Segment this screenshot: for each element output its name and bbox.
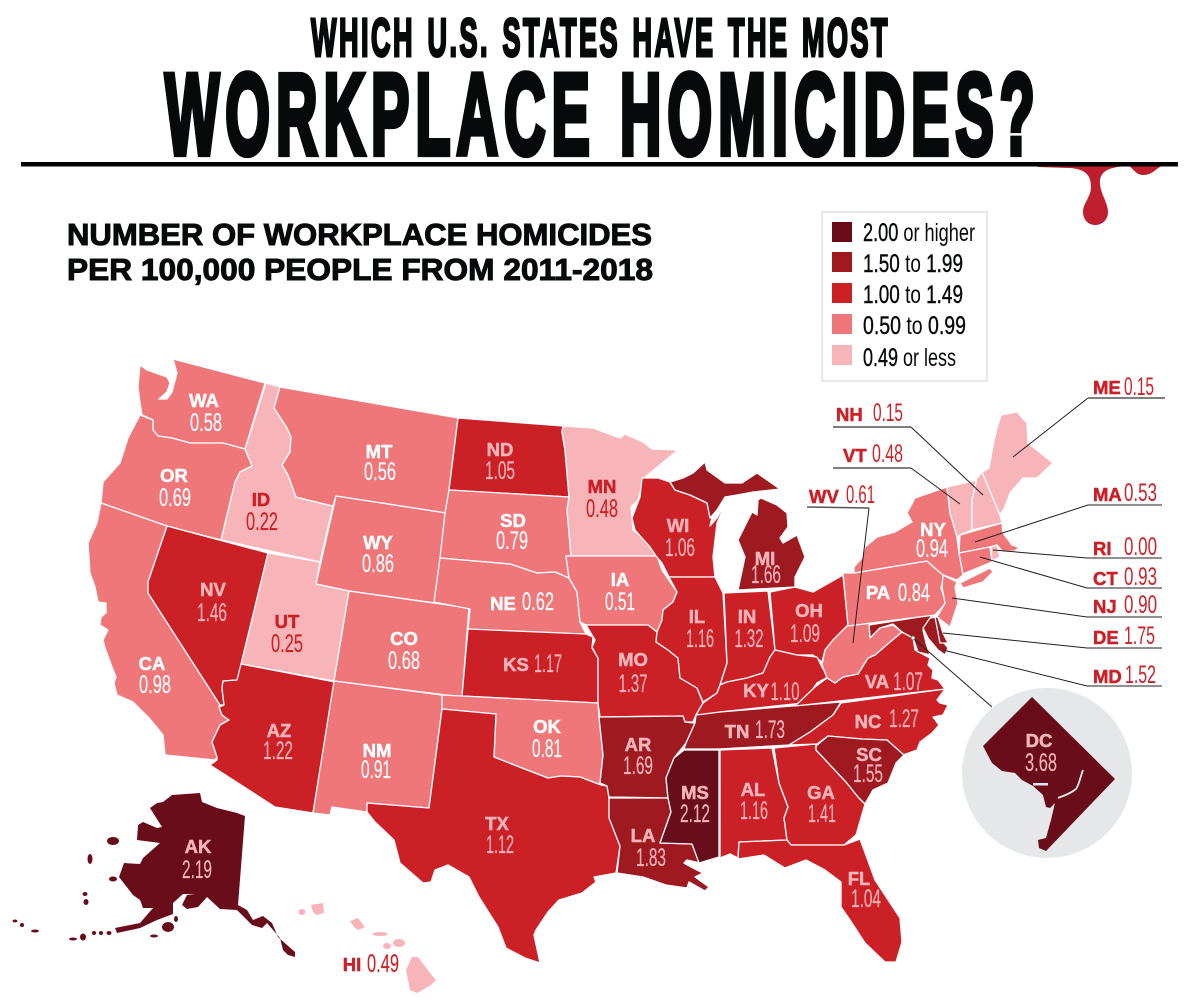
- state: NC: 1.27: [889, 705, 919, 733]
- state: WY: WY: [363, 532, 394, 553]
- state: MT: MT: [366, 441, 393, 462]
- state: MO: [586, 625, 703, 722]
- state: CA: 0.98: [139, 671, 171, 699]
- state: MS: 2.12: [680, 800, 710, 828]
- label: WV: [807, 481, 875, 643]
- state: MA: [959, 523, 1019, 553]
- DC inset: [962, 688, 1132, 858]
- label: RI: 0.00: [1124, 533, 1157, 561]
- state: MT: [274, 387, 458, 513]
- state: NM: 0.91: [361, 756, 391, 784]
- state: GA: [774, 744, 865, 845]
- legend: 1.00 to 1.49: [863, 281, 963, 309]
- state: ID: ID: [252, 489, 270, 510]
- state: SD: SD: [500, 510, 526, 531]
- state: OH: [770, 575, 848, 662]
- state: NM: [313, 681, 442, 815]
- state: ND: 1.05: [485, 457, 515, 485]
- DC inset: DC: [1026, 730, 1052, 751]
- state: WA: WA: [189, 390, 219, 411]
- state: MD: [869, 615, 948, 655]
- subtitle: [67, 217, 653, 287]
- state: OK: 0.81: [532, 735, 562, 763]
- state: TN: TN: [725, 721, 749, 742]
- state: KY: [693, 650, 828, 722]
- state: IA: 0.51: [605, 588, 635, 616]
- state: SD: 0.79: [496, 527, 528, 555]
- state: MN: 0.48: [586, 495, 618, 523]
- state: MN: MN: [588, 476, 616, 497]
- state: KS: [462, 629, 598, 703]
- state: LA: 1.83: [636, 844, 666, 872]
- state: TN: 1.73: [755, 716, 785, 744]
- state: CO: CO: [390, 628, 418, 649]
- label: MD: MD: [1093, 666, 1122, 687]
- state: HI: 0.49: [367, 950, 399, 978]
- subtitle: NUMBER OF WORKPLACE HOMICIDES: [67, 217, 652, 252]
- label: MD: 1.52: [1125, 661, 1156, 689]
- state: NV: 1.46: [197, 599, 227, 627]
- label: VT: [833, 440, 960, 504]
- state: HI: HI: [343, 954, 361, 975]
- state: NY: NY: [920, 519, 947, 540]
- state: KS: 1.17: [534, 650, 562, 678]
- state: AL: 1.16: [740, 797, 768, 825]
- state: SC: 1.55: [853, 760, 883, 788]
- state: AR: 1.69: [623, 752, 653, 780]
- state: NV: [148, 526, 268, 705]
- label: DE: DE: [1093, 627, 1119, 648]
- state: HI: [298, 903, 436, 993]
- state: VA: [795, 632, 945, 706]
- state: MO: MO: [618, 649, 648, 670]
- state: IA: IA: [611, 569, 629, 590]
- state: SC: SC: [856, 744, 882, 765]
- state: TX: [367, 709, 620, 963]
- legend: [822, 212, 987, 381]
- map of states: [12, 359, 1053, 993]
- state: AL: [720, 748, 788, 858]
- state: GA: 1.41: [808, 800, 836, 828]
- label: NJ: NJ: [1093, 596, 1117, 617]
- state: RI: [991, 545, 1000, 561]
- state: AZ: 1.22: [263, 737, 293, 765]
- state: TX: 1.12: [486, 831, 514, 859]
- label: NH: [833, 399, 983, 495]
- state: NH: [972, 472, 1002, 530]
- state: MN: [562, 426, 678, 556]
- state: FL: 1.04: [851, 885, 881, 913]
- state: NE: 0.62: [522, 588, 554, 616]
- leader lines and outside labels: [807, 373, 1165, 707]
- state: NY: 0.94: [916, 535, 948, 563]
- state: VT: [947, 480, 977, 537]
- state: OH: OH: [795, 600, 823, 621]
- state: AL: AL: [741, 779, 765, 800]
- state: WI: [632, 478, 728, 577]
- state: TN: [684, 702, 841, 749]
- label: DE: [943, 622, 1162, 650]
- label: ME: [1013, 373, 1165, 457]
- label: VT: VT: [843, 445, 867, 466]
- label: ME: ME: [1093, 377, 1121, 398]
- state: ME: [982, 412, 1053, 515]
- DC leader line with pointer dot: [911, 636, 992, 707]
- label: NJ: [952, 591, 1162, 619]
- title: WHICH U.S. STATES HAVE THE MOST: [311, 8, 890, 69]
- state: SD: [440, 490, 571, 578]
- legend: 0.50 to 0.99: [863, 312, 966, 340]
- state: WA: [138, 359, 265, 449]
- state: IL: [656, 577, 727, 702]
- state: NV: NV: [200, 579, 227, 600]
- legend: 0.49 or less: [863, 344, 956, 372]
- state: CO: [334, 591, 469, 697]
- state: MS: MS: [681, 782, 709, 803]
- state: IL: 1.16: [686, 625, 714, 653]
- state: PA: [843, 561, 946, 626]
- state: AZ: [210, 664, 335, 813]
- state: AK: [12, 793, 295, 957]
- state: AK: 2.19: [182, 856, 212, 884]
- state: OK: OK: [533, 716, 562, 737]
- state: OK: [442, 695, 603, 785]
- state: NE: [434, 558, 593, 637]
- state: ID: [221, 383, 333, 562]
- state: OR: 0.69: [159, 484, 191, 512]
- state: CT: [959, 547, 992, 574]
- label: NH: 0.15: [873, 399, 903, 427]
- label: CT: CT: [1093, 568, 1118, 589]
- state: WA: 0.58: [190, 409, 222, 437]
- blood drip under title rule: [1038, 166, 1162, 225]
- label: NH: NH: [836, 404, 863, 425]
- label: MA: MA: [1093, 484, 1122, 505]
- state: NJ: [937, 575, 958, 627]
- state: MO: 1.37: [618, 670, 648, 698]
- state: KY: KY: [743, 680, 770, 701]
- subtitle: PER 100,000 PEOPLE FROM 2011-2018: [67, 252, 653, 287]
- state: GA: GA: [807, 782, 835, 803]
- label: VT: 0.48: [872, 440, 903, 468]
- label: RI: [993, 533, 1162, 561]
- state: TX: TX: [485, 813, 509, 834]
- state: VA: 1.07: [893, 668, 923, 696]
- state: ND: ND: [487, 439, 513, 460]
- state: OH: 1.09: [790, 620, 820, 648]
- label: WV: 0.61: [846, 481, 875, 509]
- state: NC: NC: [855, 711, 881, 732]
- state: AZ: AZ: [267, 720, 291, 741]
- state: PA: 0.84: [898, 579, 930, 607]
- state: NY: [854, 487, 993, 588]
- state: KY: 1.10: [770, 678, 800, 706]
- state: IA: [566, 556, 677, 632]
- state: NC: [789, 689, 948, 755]
- state: AR: AR: [625, 734, 651, 755]
- state: KS: KS: [503, 654, 529, 675]
- state: NE: NE: [490, 593, 516, 614]
- state: IL: IL: [689, 606, 705, 627]
- state: AR: [599, 716, 695, 798]
- state: MT: 0.56: [364, 458, 396, 486]
- state: LA: LA: [631, 825, 655, 846]
- label: WV: WV: [809, 486, 839, 507]
- state: FL: FL: [848, 868, 870, 889]
- label: MA: [975, 479, 1162, 542]
- label: MD: [943, 650, 1162, 689]
- state: VA: VA: [865, 671, 889, 692]
- label: NJ: 0.90: [1124, 591, 1157, 619]
- state: PA: PA: [866, 582, 890, 603]
- state: MS: [660, 750, 719, 863]
- state: UT: UT: [275, 611, 300, 632]
- state: IN: [720, 591, 775, 685]
- state: WI: WI: [667, 515, 689, 536]
- label: RI: RI: [1093, 538, 1112, 559]
- state: WI: 1.06: [665, 534, 695, 562]
- state: ID: 0.22: [246, 508, 278, 536]
- state: OR: [101, 415, 252, 540]
- label: CT: 0.93: [1124, 563, 1157, 591]
- label: MA: 0.53: [1124, 479, 1157, 507]
- state: DE: [935, 617, 948, 643]
- state: ND: [449, 418, 569, 497]
- state: NM: NM: [363, 740, 391, 761]
- DC inset: 3.68: [1025, 749, 1057, 777]
- state: OR: OR: [160, 465, 188, 486]
- state: FL: [738, 839, 902, 962]
- state: MI: MI: [755, 548, 775, 569]
- state: SC: [816, 736, 904, 804]
- legend: 2.00 or higher: [863, 219, 975, 247]
- state: LA: [609, 798, 709, 891]
- state: WY: [316, 496, 446, 603]
- title: WORKPLACE HOMICIDES?: [165, 52, 1041, 179]
- legend: 1.50 to 1.99: [863, 250, 963, 278]
- label: CT: [980, 557, 1162, 591]
- label: ME: 0.15: [1124, 373, 1154, 401]
- state: IN: IN: [738, 606, 756, 627]
- title rule: [21, 162, 1178, 166]
- state: WY: 0.86: [362, 550, 394, 578]
- label: DE: 1.75: [1124, 622, 1155, 650]
- state: UT: 0.25: [271, 630, 303, 658]
- state: CA: [88, 503, 229, 760]
- state: AK: AK: [185, 836, 212, 857]
- state: WV: [822, 623, 902, 683]
- state: UT: [241, 553, 349, 681]
- state: CA: CA: [139, 653, 165, 674]
- state: CO: 0.68: [388, 647, 420, 675]
- state: IN: 1.32: [734, 625, 764, 653]
- state: MI: [670, 462, 805, 590]
- state: MI: 1.66: [751, 561, 781, 589]
